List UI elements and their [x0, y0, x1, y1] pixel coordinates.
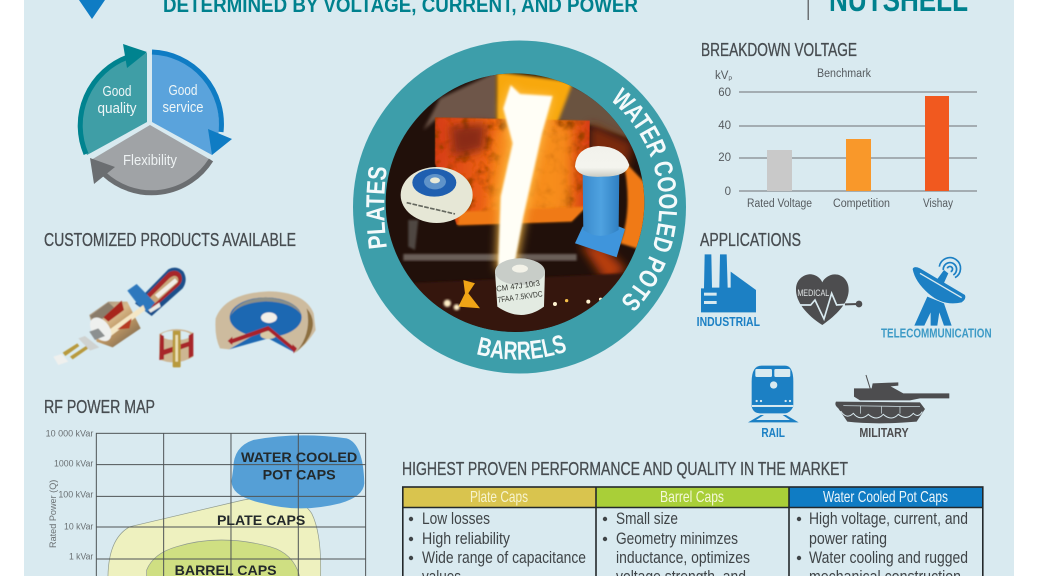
cycle diagram	[80, 44, 232, 193]
photo: barrel capacitor: CM 47J 10r3	[496, 279, 541, 294]
region labels: POT CAPS	[263, 466, 336, 482]
axis labels: Vishay	[923, 198, 953, 210]
region labels: PLATE CAPS	[217, 512, 305, 528]
column: barrel caps	[596, 487, 789, 576]
heading: applications: APPLICATIONS	[700, 230, 801, 250]
axis labels: 20	[718, 152, 731, 164]
icon: rail train: RAIL	[761, 426, 785, 440]
axis labels: Competition	[833, 198, 890, 210]
axis labels: kV	[715, 70, 728, 82]
column: water cooled pot caps: power rating	[809, 530, 887, 548]
column: plate caps: High reliability	[422, 530, 511, 548]
y axis labels: Rated Power (Q)	[48, 480, 58, 548]
y axis labels	[46, 428, 93, 562]
cutaway: exploded assembly	[53, 268, 186, 365]
photo: barrel capacitor: 7FAA 7.5KVDC	[497, 289, 543, 305]
column: water cooled pot caps: Water Cooled Pot Caps	[823, 489, 948, 506]
y axis labels: 10 000 kVar	[46, 428, 93, 438]
icon: header down arrow	[79, 0, 105, 19]
ring label: water cooled pots: WATER COOLED POTS	[612, 86, 678, 310]
region labels	[175, 449, 357, 576]
icon: military tank	[835, 375, 949, 440]
heading: customized products: CUSTOMIZED PRODUCTS AVAILABLE	[44, 230, 296, 250]
comparison table	[402, 487, 983, 576]
column: barrel caps: Small size	[616, 510, 678, 528]
axis labels: Rated Voltage	[747, 198, 812, 210]
bar chart: breakdown voltage benchmark	[715, 68, 977, 210]
cutaway: barrel	[159, 329, 193, 367]
axis labels: 0	[725, 186, 731, 198]
region: barrel caps	[147, 540, 302, 576]
region labels: WATER COOLED	[241, 449, 357, 465]
column: plate caps: Low losses	[422, 510, 490, 528]
column: plate caps: Plate Caps	[470, 489, 528, 506]
y axis labels: 1 kVar	[69, 552, 93, 562]
icon: industrial factory: INDUSTRIAL	[697, 315, 760, 329]
ring label: barrels: BARRELS	[477, 335, 566, 360]
chart: rf power map	[46, 428, 366, 576]
y axis labels: 1000 kVar	[54, 458, 93, 468]
axis labels: 40	[718, 120, 731, 132]
icon: industrial factory	[697, 254, 760, 329]
icon: telecommunication dish	[881, 258, 992, 341]
segment: good quality	[80, 44, 147, 155]
ring label: plates: PLATES	[366, 166, 387, 249]
icon: medical heart	[796, 274, 862, 325]
icon: medical heart: MEDICAL	[797, 288, 829, 298]
segment: good quality: quality	[98, 100, 137, 117]
teal ring	[353, 40, 686, 374]
axis labels: P	[728, 77, 732, 83]
bar: rated voltage	[767, 150, 792, 191]
photo: plate capacitor	[401, 167, 473, 223]
column: barrel caps: Geometry minimzes	[616, 530, 738, 548]
heading: breakdown voltage: BREAKDOWN VOLTAGE	[701, 40, 857, 60]
column: barrel caps: Barrel Caps	[660, 489, 724, 506]
region: water cooled pot caps	[232, 435, 364, 508]
column: plate caps	[403, 487, 596, 576]
region: plate caps	[108, 497, 321, 576]
column: plate caps: Wide range of capacitance	[422, 549, 586, 567]
segment: good service: Good	[168, 82, 198, 99]
icon: telecommunication dish: TELECOMMUNICATION	[881, 327, 992, 341]
axis labels	[715, 68, 953, 210]
column: water cooled pot caps	[789, 487, 982, 576]
column: water cooled pot caps: High voltage, current, and	[809, 510, 968, 528]
central medallion	[353, 40, 686, 374]
icon: rail train	[748, 366, 799, 440]
segment: good service	[152, 52, 232, 155]
heading: rf power map: RF POWER MAP	[44, 397, 155, 417]
applications icons	[697, 254, 992, 440]
column: water cooled pot caps: Water cooling and rugged	[809, 549, 968, 567]
y axis labels: 100 kVar	[58, 489, 93, 499]
photo: water cooled pot capacitor	[575, 146, 629, 257]
bar: competition	[846, 139, 871, 191]
photo: barrel capacitor	[495, 258, 545, 315]
icon: military tank: MILITARY	[859, 426, 909, 440]
furnace photo	[383, 72, 650, 335]
axis labels: Benchmark	[817, 68, 871, 80]
illustration: customized capacitor cutaways	[53, 268, 316, 367]
segment: good quality: Good	[102, 83, 132, 100]
segment: flexibility: Flexibility	[123, 152, 177, 169]
axis labels: 60	[718, 87, 731, 99]
bar: vishay	[925, 96, 949, 191]
cutaway: plate	[215, 291, 316, 353]
column: barrel caps: inductance, optimizes	[616, 549, 750, 567]
segment: flexibility	[90, 125, 211, 193]
y axis labels: 10 kVar	[64, 521, 93, 531]
segment: good service: service	[162, 99, 204, 116]
heading: highest proven performance: HIGHEST PROVEN PERFORMANCE AND QUALITY IN THE MARKET	[402, 459, 848, 479]
